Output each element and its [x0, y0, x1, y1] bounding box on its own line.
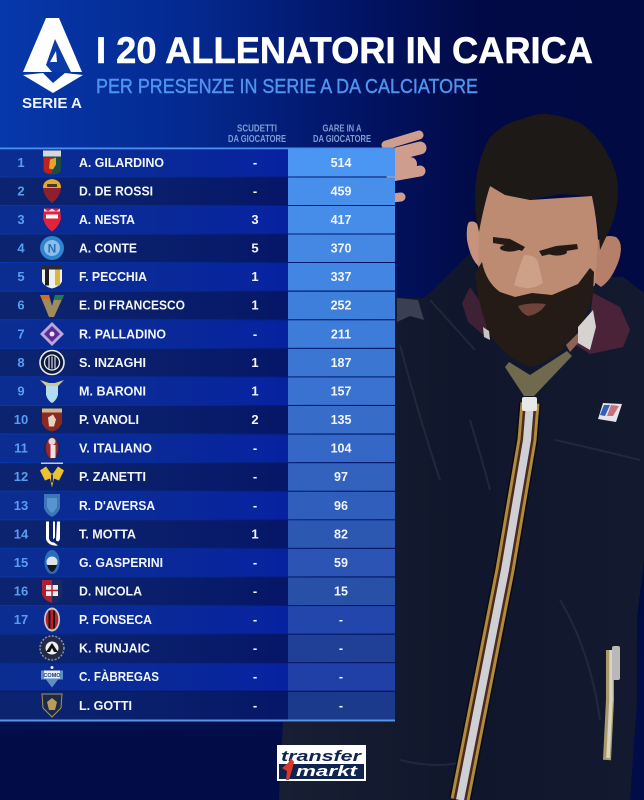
left shirt collar	[483, 327, 490, 340]
rank numbers: 17	[14, 612, 28, 627]
crest: Como	[41, 666, 63, 688]
appearances column values: 417	[331, 213, 351, 227]
rank numbers: 3	[17, 212, 25, 227]
appearances column values: 97	[334, 470, 348, 484]
scudetti column values: 2	[251, 412, 259, 427]
coach names: G. GASPERINI	[79, 555, 163, 570]
coach names: A. CONTE	[79, 240, 137, 256]
scudetti column values: -	[253, 698, 257, 713]
pocket zipper	[607, 646, 620, 760]
scudetti column values: -	[253, 469, 257, 484]
crest: Torino	[42, 408, 62, 432]
coach names: A. GILARDINO	[79, 155, 164, 170]
column header: scudetti: SCUDETTI	[237, 124, 277, 134]
rank numbers: 8	[17, 355, 25, 370]
column header: scudetti	[228, 124, 286, 145]
appearances column values: 337	[331, 270, 351, 284]
appearances column values: 15	[334, 584, 348, 598]
appearances column values: 157	[331, 384, 351, 398]
crest: Empoli	[44, 494, 60, 517]
rank numbers: 5	[17, 269, 25, 284]
beard	[475, 262, 594, 367]
crest: Lazio	[40, 380, 64, 403]
scudetti column values: -	[253, 669, 257, 684]
shoulder highlight	[397, 298, 424, 322]
coach names: E. DI FRANCESCO	[79, 298, 185, 313]
appearances column values: 59	[334, 556, 348, 570]
appearances column values: -	[339, 699, 343, 713]
logo red figure	[282, 758, 294, 780]
crest: Napoli: N	[48, 242, 56, 256]
coach names: M. BARONI	[79, 383, 146, 398]
coach photo: Thiago Motta	[279, 114, 644, 800]
appearances column values: 104	[331, 442, 351, 456]
face	[478, 186, 598, 320]
right ear	[594, 236, 621, 287]
left ear	[467, 221, 481, 268]
rank numbers: 15	[14, 555, 28, 570]
crest: Roma	[43, 179, 61, 203]
coach names: A. NESTA	[79, 212, 136, 227]
lips	[518, 303, 546, 316]
coach names: R. PALLADINO	[79, 326, 166, 341]
coach names: P. VANOLI	[79, 412, 139, 427]
crest: Venezia	[40, 295, 64, 317]
scudetti column values: -	[253, 584, 257, 598]
crest: Napoli	[40, 236, 64, 260]
k-way logo	[598, 403, 622, 422]
appearances column values: -	[339, 670, 343, 684]
ranking table	[0, 148, 395, 722]
appearances column values: -	[339, 613, 343, 627]
jacket	[279, 253, 644, 800]
scudetti column values: 3	[251, 212, 259, 227]
scudetti column values: 1	[251, 298, 259, 313]
crest: Inter	[40, 350, 64, 374]
nose	[514, 255, 543, 288]
title: I 20 ALLENATORI IN CARICA	[96, 30, 593, 71]
logo A inner cut	[46, 39, 71, 72]
crest: Lecce	[42, 694, 62, 717]
appearances column values: 82	[334, 527, 348, 541]
Serie A logo	[22, 18, 83, 112]
appearances column values	[331, 156, 351, 713]
value column bars	[288, 149, 395, 720]
scudetti column values: 1	[251, 526, 259, 541]
rank numbers: 9	[17, 383, 25, 398]
neck skin	[566, 333, 578, 352]
scudetti column values: -	[253, 155, 257, 170]
rank numbers: 10	[14, 412, 28, 427]
coach names: P. FONSECA	[79, 612, 153, 627]
column header: gare: DA GIOCATORE	[313, 134, 371, 145]
coach names: C. FÀBREGAS	[79, 669, 159, 684]
hand fingers	[386, 135, 420, 198]
coach names: T. MOTTA	[79, 526, 137, 541]
logo text: SERIE A	[22, 96, 83, 112]
rank numbers: 16	[14, 584, 28, 598]
appearances column values: 370	[331, 242, 351, 256]
coach names: L. GOTTI	[79, 698, 132, 713]
appearances column values: 459	[331, 184, 351, 198]
appearances column values: 135	[331, 413, 351, 427]
hair	[475, 114, 618, 250]
zipper pull	[522, 397, 537, 411]
coach names: S. INZAGHI	[79, 355, 146, 370]
row backgrounds	[0, 149, 288, 720]
logo A mark	[23, 18, 82, 72]
jacket fold highlights	[400, 300, 640, 765]
crest: Cagliari	[42, 580, 62, 603]
crest: Atalanta	[44, 550, 60, 574]
crest: Fiorentina	[40, 322, 64, 346]
appearances column values: 187	[331, 356, 351, 370]
table top rule	[0, 148, 395, 149]
appearances column values: 252	[331, 299, 351, 313]
logo lower band	[279, 764, 364, 779]
scudetti column values: -	[253, 555, 257, 570]
appearances column values: -	[339, 642, 343, 656]
column header: scudetti: DA GIOCATORE	[228, 134, 286, 145]
jacket main zipper stripes	[460, 403, 530, 800]
white shirt collar	[578, 310, 596, 350]
appearances column values: 96	[334, 499, 348, 513]
column header: gare	[313, 124, 371, 145]
rank numbers: 11	[14, 441, 28, 456]
subtitle: PER PRESENZE IN SERIE A DA CALCIATORE	[96, 75, 478, 98]
scudetti column values: 5	[251, 240, 259, 256]
crest: Verona	[40, 462, 64, 488]
logo frame	[277, 745, 366, 781]
rank numbers: 6	[17, 298, 25, 313]
rank numbers	[14, 155, 29, 627]
crest: Monza	[43, 208, 61, 232]
logo word markt: markt	[296, 763, 358, 780]
coach names: K. RUNJAIC	[79, 641, 151, 656]
scudetti column values: 1	[251, 355, 259, 370]
crest: Parma	[42, 266, 62, 288]
table bottom rule	[0, 720, 395, 722]
column header: gare: GARE IN A	[322, 124, 362, 134]
logo word transfer: transfer	[281, 748, 363, 765]
zip collar V	[505, 351, 572, 396]
coach names: R. D'AVERSA	[79, 498, 156, 513]
left maroon collar	[462, 287, 487, 338]
crest: Como: COMO	[43, 673, 61, 679]
rank numbers: 7	[17, 326, 25, 341]
scudetti column values: -	[253, 641, 257, 656]
scudetti column values: -	[253, 184, 257, 198]
rank numbers: 2	[17, 184, 25, 198]
maroon collar	[576, 293, 630, 354]
scudetti column values: 1	[251, 269, 259, 284]
brows and eyes	[493, 237, 578, 256]
crest: Udinese	[40, 636, 64, 660]
rank numbers: 13	[14, 498, 28, 513]
crest: Genoa	[43, 150, 61, 174]
transfermarkt logo	[277, 745, 366, 781]
scudetti column values	[251, 155, 259, 713]
coach names: V. ITALIANO	[79, 441, 152, 456]
scudetti column values: -	[253, 441, 257, 456]
rank numbers: 1	[17, 155, 25, 170]
crest: Milan	[44, 608, 60, 632]
scudetti column values: -	[253, 326, 257, 341]
crest: Juventus	[46, 522, 60, 546]
coach names: P. ZANETTI	[79, 469, 146, 484]
appearances column values: 211	[331, 327, 351, 341]
coach names: F. PECCHIA	[79, 269, 148, 284]
rank numbers: 14	[14, 526, 29, 541]
coach names	[79, 155, 185, 713]
scudetti column values: 1	[251, 383, 259, 398]
coach names: D. DE ROSSI	[79, 184, 153, 198]
logo chevron	[23, 73, 83, 93]
scudetti column values: -	[253, 498, 257, 513]
logo A crossbar	[50, 51, 57, 62]
crest: Bologna	[44, 436, 60, 460]
rank numbers: 4	[17, 240, 25, 256]
appearances column values: 514	[331, 156, 351, 170]
coach names: D. NICOLA	[79, 584, 143, 598]
scudetti column values: -	[253, 612, 257, 627]
rank numbers: 12	[14, 469, 28, 484]
